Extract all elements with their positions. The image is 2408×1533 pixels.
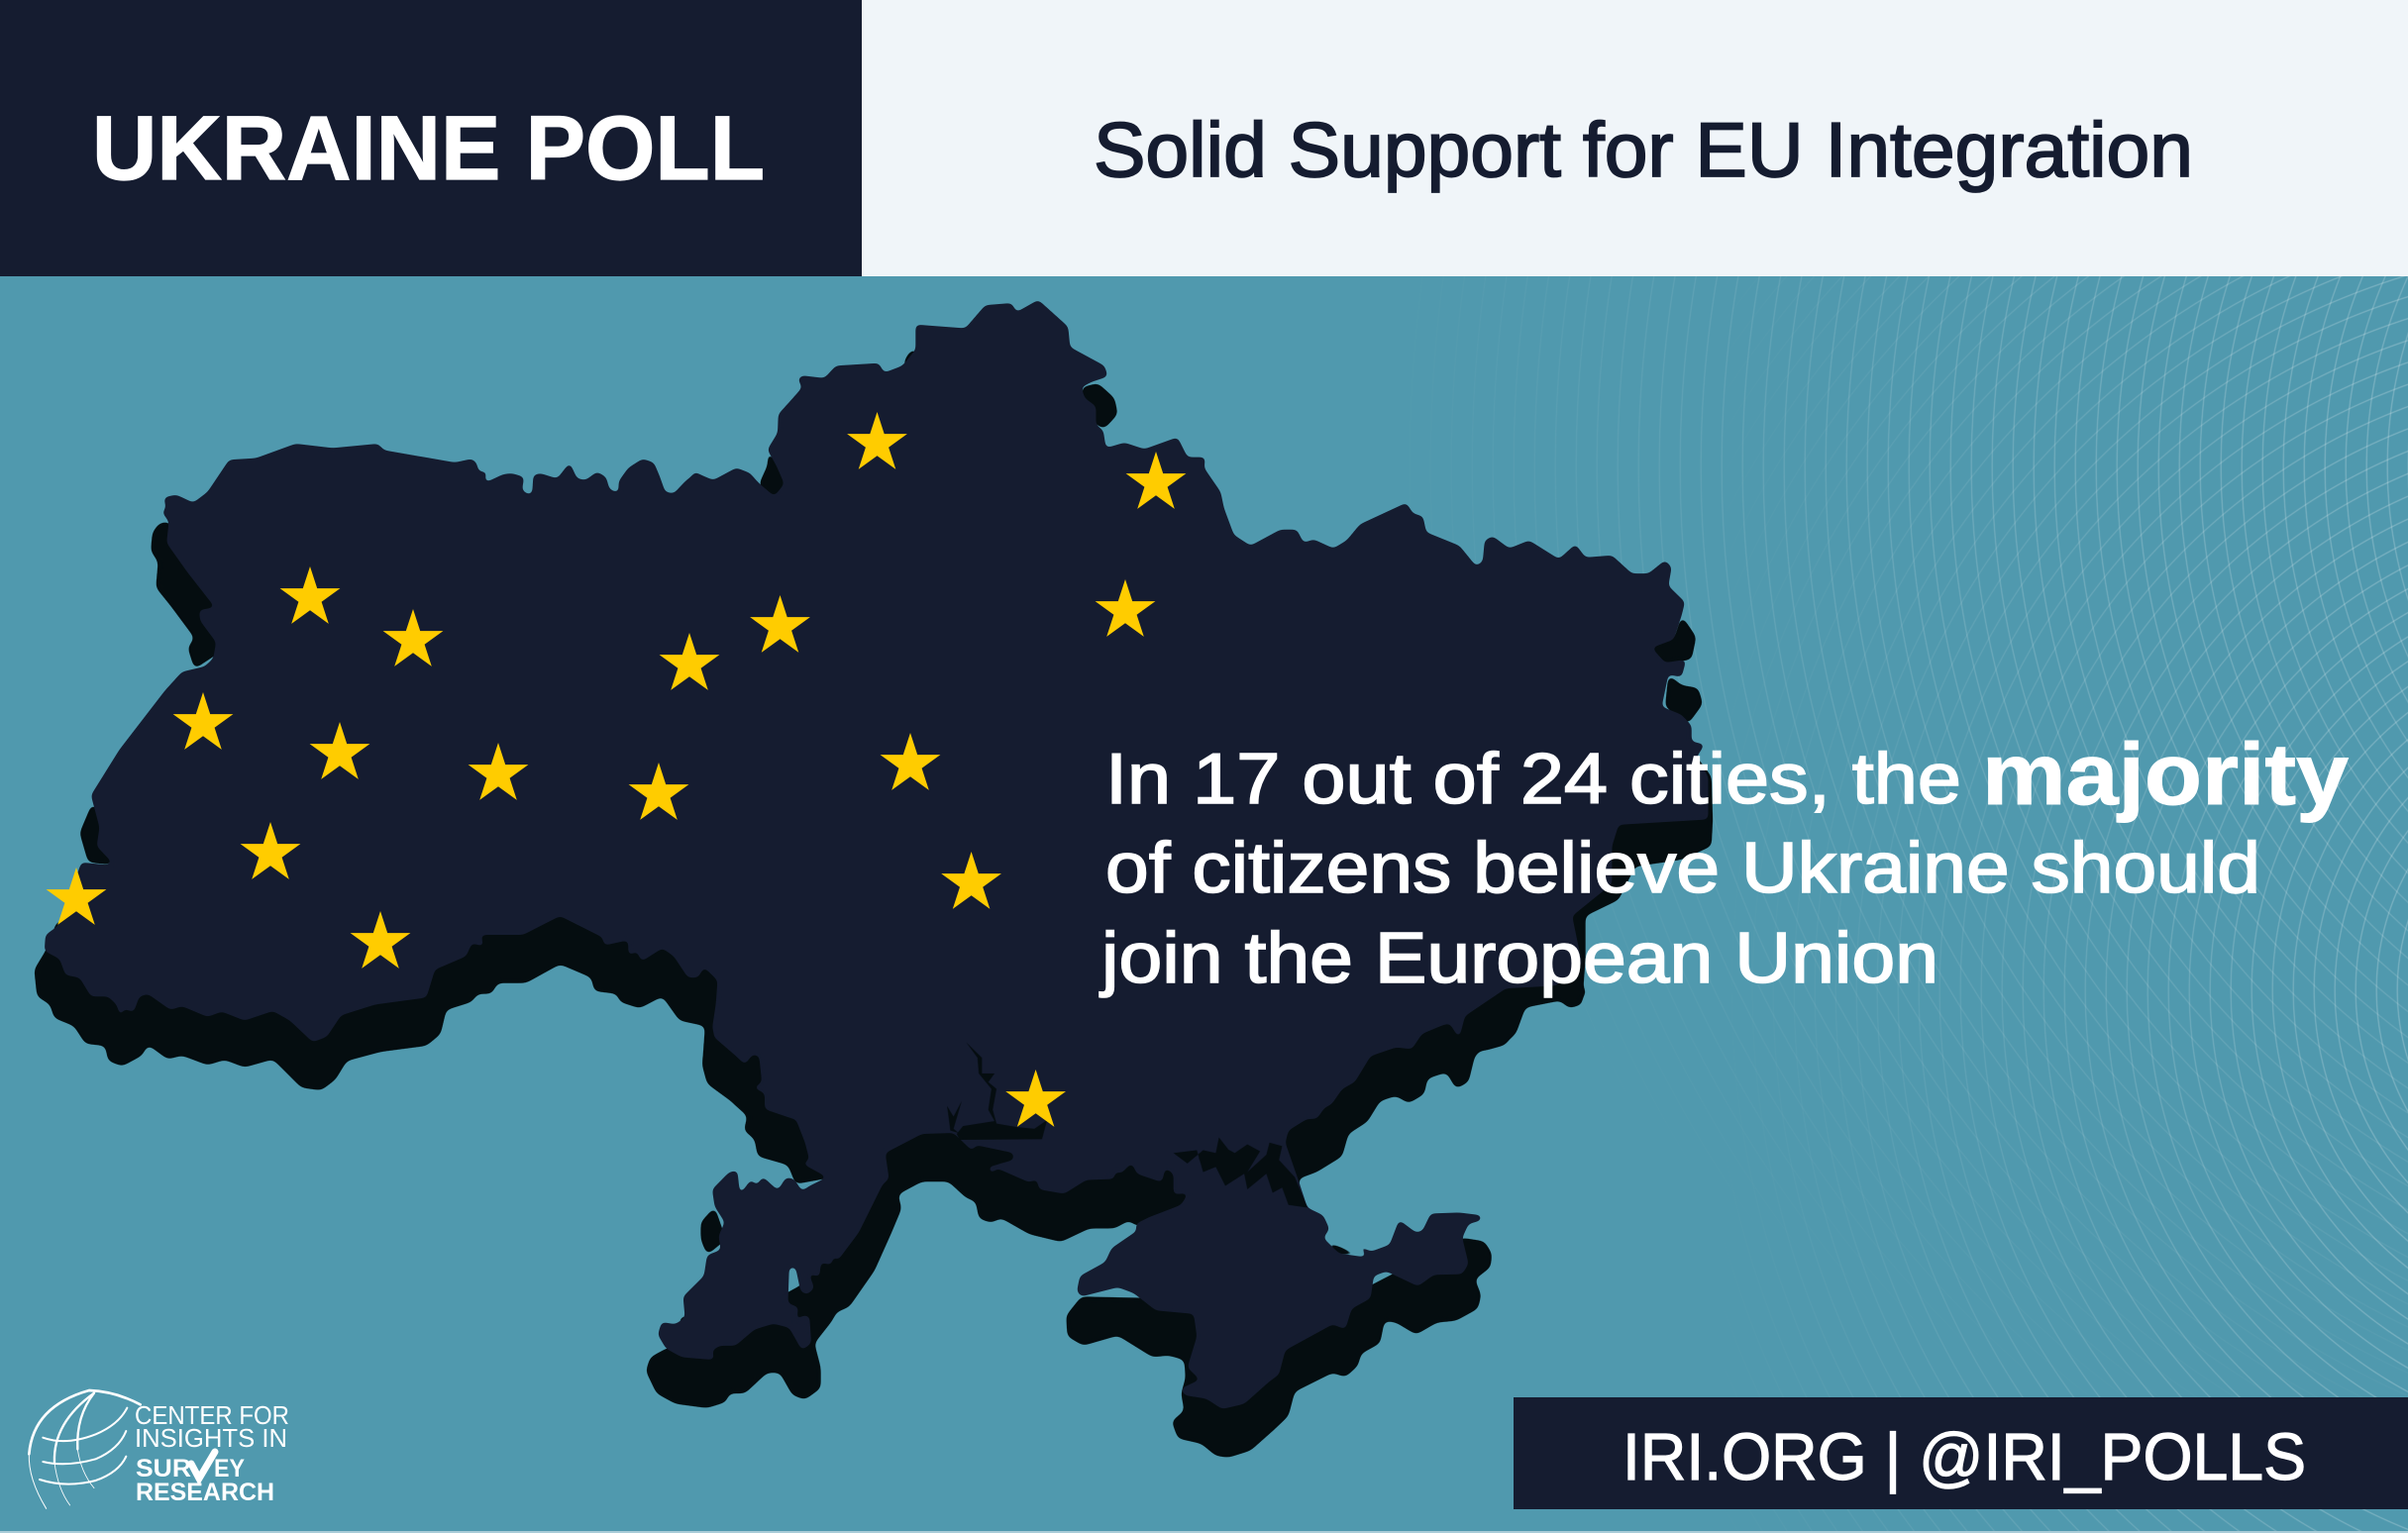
logo wordmark: INSIGHTS IN	[135, 1423, 287, 1453]
logo wordmark: EY	[214, 1455, 245, 1482]
key finding text: majority	[1982, 725, 2349, 823]
footer contact bar: IRI.ORG | @IRI_POLLS	[1623, 1420, 2306, 1494]
background mesh: family B	[1848, 276, 2408, 1531]
key finding text: In 17 out of 24 cities, the	[1105, 740, 1961, 819]
key finding text	[1099, 725, 2349, 998]
EU stars	[47, 412, 1186, 1127]
key finding text: join the European Union	[1099, 919, 1938, 998]
logo wordmark: CENTER FOR	[135, 1400, 289, 1430]
river and Sivash details	[947, 1042, 1308, 1207]
logo wordmark	[135, 1400, 289, 1506]
logo: Center for Insights in Survey Research	[29, 1390, 289, 1508]
subtitle: Solid Support for EU Integration	[1094, 106, 2193, 193]
header right panel	[862, 0, 2408, 276]
logo wordmark: SUR	[136, 1455, 191, 1482]
header left panel	[0, 0, 862, 276]
footer contact bar	[1514, 1397, 2408, 1509]
icon: globe	[29, 1390, 141, 1508]
key finding text: of citizens believe Ukraine should	[1105, 829, 2260, 908]
map of Ukraine	[34, 300, 1713, 1458]
map drop shadow	[34, 347, 1713, 1458]
title: UKRAINE POLL	[92, 98, 765, 199]
logo wordmark: RESEARCH	[136, 1479, 274, 1506]
icon: check mark	[191, 1452, 215, 1479]
background mesh: family A	[1555, 276, 2408, 1307]
map landmass	[45, 300, 1708, 1409]
